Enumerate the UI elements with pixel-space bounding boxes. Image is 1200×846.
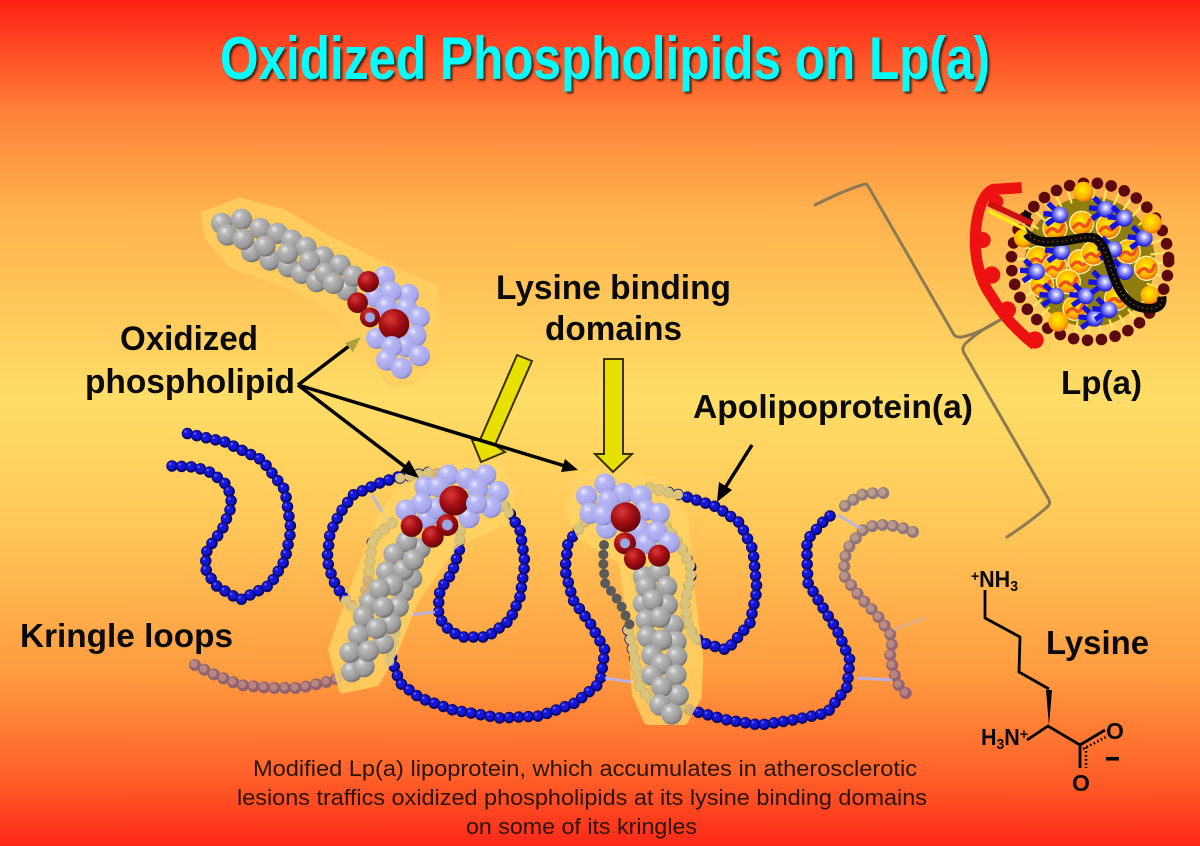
yellow arrow: lysine binding domain left — [472, 355, 532, 462]
arrow: apolipoprotein(a) pointer — [717, 445, 752, 502]
gray bead segment — [603, 545, 632, 630]
Faded kringle chains — [194, 492, 913, 698]
structure: lysine: 3 — [997, 736, 1004, 753]
structure: lysine: 3 — [1010, 578, 1018, 595]
structure: lysine: H — [981, 724, 998, 750]
label: Lp(a): Lp(a) — [1061, 364, 1142, 401]
label: kringle loops: Kringle loops — [20, 617, 233, 654]
label: lysine: Lysine — [1046, 624, 1149, 661]
title: Oxidized Phospholipids on Lp(a) — [220, 25, 990, 92]
molecule: oxidized phospholipid in right kringle — [576, 473, 689, 725]
heading: lysine binding domains: Lysine binding — [496, 269, 731, 307]
halo: free oxidized phospholipid — [205, 202, 437, 383]
Kringle cross links — [372, 495, 925, 682]
heading: lysine binding domains: domains — [545, 310, 682, 348]
heading: lysine binding domains — [496, 269, 731, 348]
structure: lysine: O — [1106, 718, 1124, 744]
label: oxidized phospholipid: phospholipid — [85, 363, 295, 401]
structure: lysine: + — [971, 568, 979, 585]
label: oxidized phospholipid — [85, 320, 295, 401]
icon: Lp(a) lipoprotein particle — [975, 182, 1169, 349]
structure: lysine: NH — [979, 566, 1010, 592]
caption: on some of its kringles — [466, 814, 697, 839]
arrows from oxidized phospholipid label — [298, 337, 578, 478]
label: apolipoprotein(a): Apolipoprotein(a) — [693, 388, 973, 425]
molecule: free oxidized phospholipid — [211, 209, 430, 379]
bracket linking Lp(a) to detail — [815, 184, 1050, 537]
label: oxidized phospholipid: Oxidized — [120, 320, 258, 358]
structure: lysine — [971, 566, 1124, 796]
halo: lipid on kringle left — [333, 467, 512, 688]
tan beads veiled by halos — [342, 472, 697, 708]
caption: Modified Lp(a) lipoprotein, which accumulates in atherosclerotic — [253, 756, 917, 781]
molecule: oxidized phospholipid in left kringle — [339, 464, 509, 682]
Kringle chains: blue beads — [170, 431, 850, 725]
caption: lesions traffics oxidized phospholipids at its lysine binding domains — [237, 785, 927, 810]
caption — [237, 756, 927, 839]
structure: lysine: O — [1072, 770, 1090, 796]
yellow arrow: lysine binding domain right — [595, 359, 632, 472]
halo: lipid on kringle right — [570, 470, 698, 720]
structure: lysine: + — [1020, 726, 1028, 743]
structure: lysine: N — [1004, 724, 1020, 750]
